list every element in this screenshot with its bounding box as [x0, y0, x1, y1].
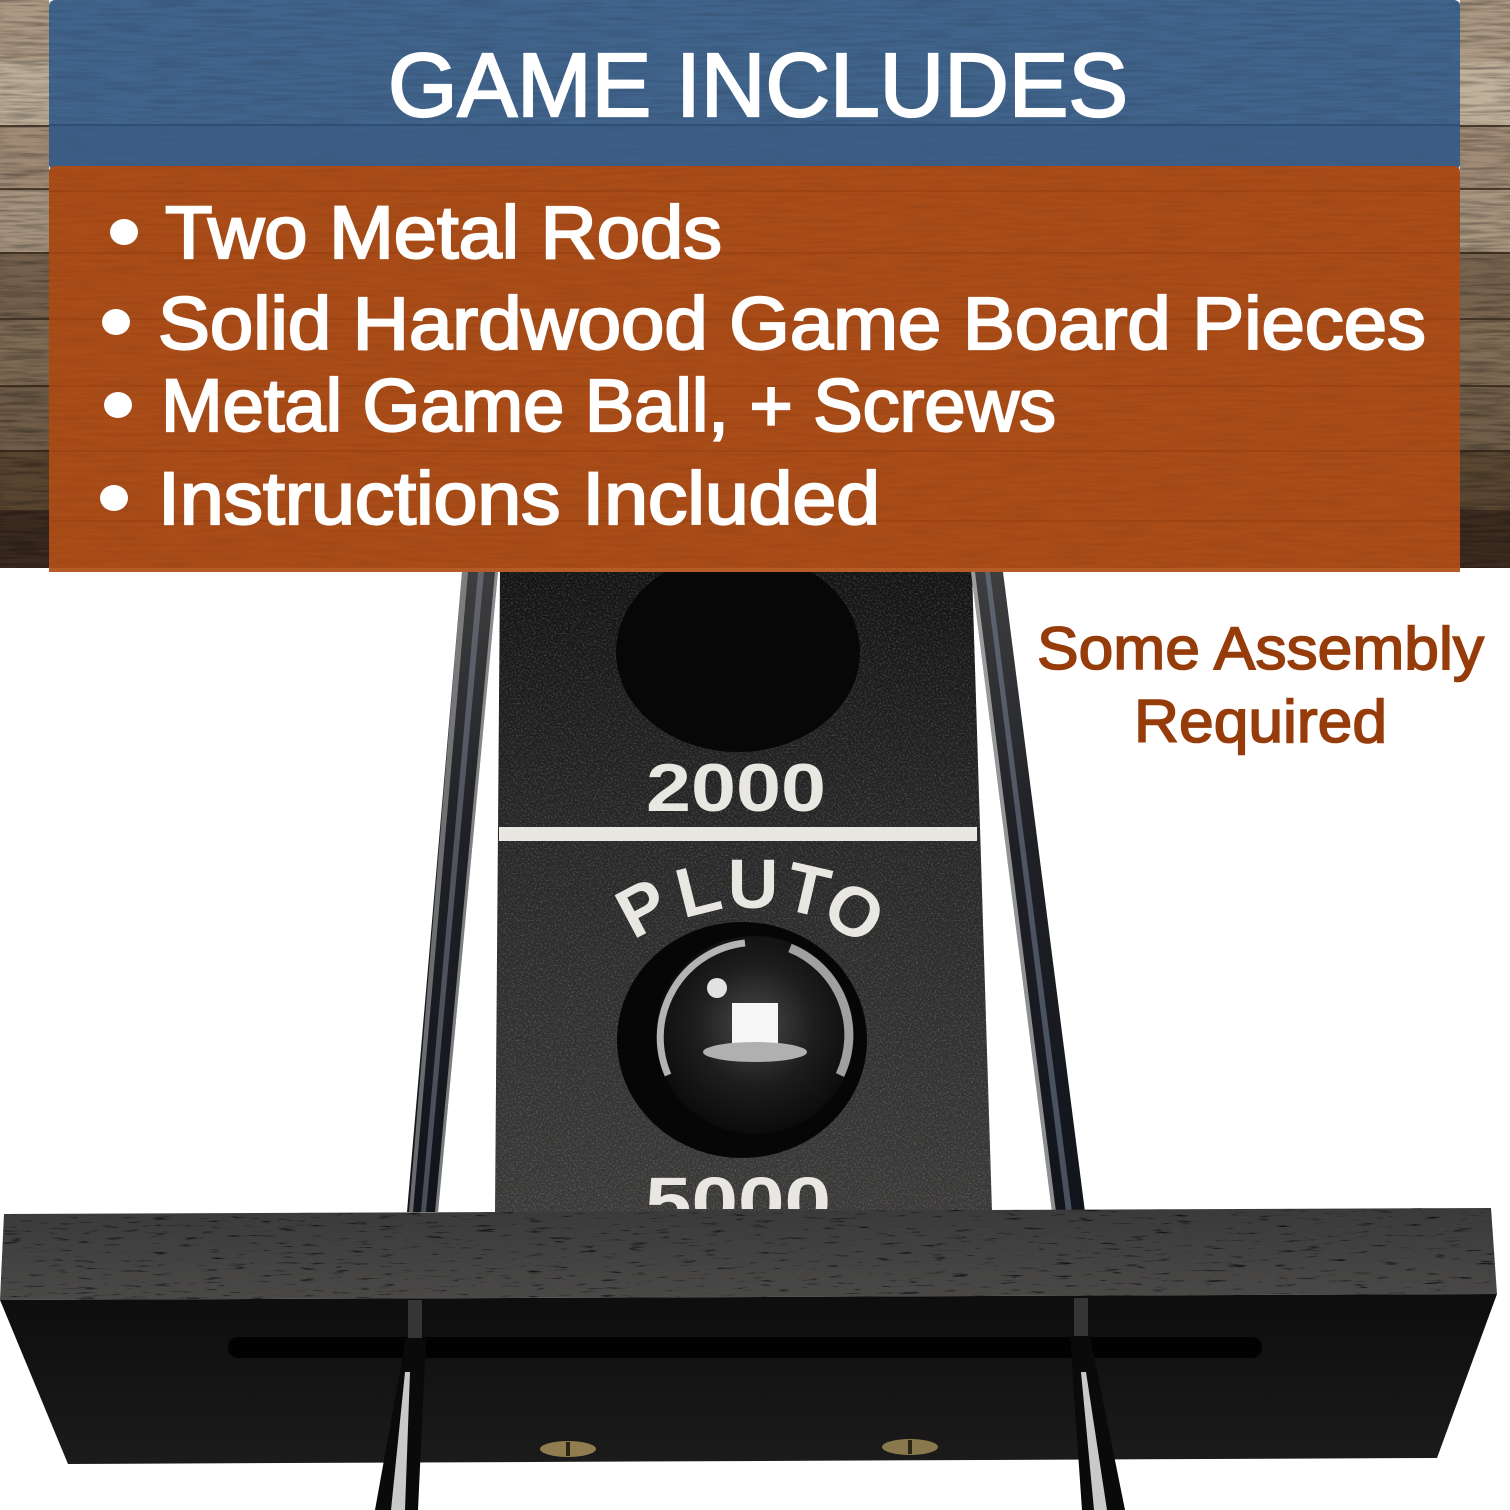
list item: instructions: Instructions Included	[158, 457, 880, 540]
label PLUTO: U	[728, 845, 778, 923]
assembly note	[1037, 615, 1484, 755]
wood plank background	[0, 0, 1510, 568]
rod reflections	[408, 1298, 1088, 1338]
label PLUTO	[604, 845, 898, 959]
ball socket	[617, 922, 867, 1158]
assembly note: Required	[1134, 688, 1387, 755]
label PLUTO: O	[811, 864, 898, 959]
label PLUTO: P	[604, 862, 681, 953]
label PLUTO: L	[668, 847, 728, 933]
base front face	[0, 1294, 1497, 1464]
game board photo	[490, 552, 1000, 1241]
list item: game board pieces: Solid Hardwood Game Board Pieces	[158, 282, 1426, 365]
panel: contents list	[49, 166, 1460, 572]
panel: title banner	[49, 0, 1460, 170]
slot	[228, 1337, 1262, 1358]
divider line	[499, 827, 977, 841]
score 5000 (cut off): 5000	[645, 1163, 831, 1241]
label PLUTO: T	[778, 847, 837, 933]
left metal rod	[407, 572, 498, 1212]
assembly note: Some Assembly	[1037, 615, 1484, 682]
lower rods through base	[375, 1336, 1125, 1510]
score 2000: 2000	[646, 750, 826, 826]
list item: two metal rods: Two Metal Rods	[165, 191, 722, 274]
brass screw right	[882, 1439, 938, 1455]
right metal rod	[971, 572, 1085, 1212]
title: GAME INCLUDES	[388, 36, 1128, 136]
metal ball	[656, 936, 854, 1134]
wooden base block	[0, 1206, 1500, 1510]
brass screw left	[540, 1441, 596, 1457]
upper score hole	[616, 552, 860, 752]
base top face	[0, 1208, 1497, 1300]
list item: game ball and screws: Metal Game Ball, + Screws	[161, 364, 1056, 447]
